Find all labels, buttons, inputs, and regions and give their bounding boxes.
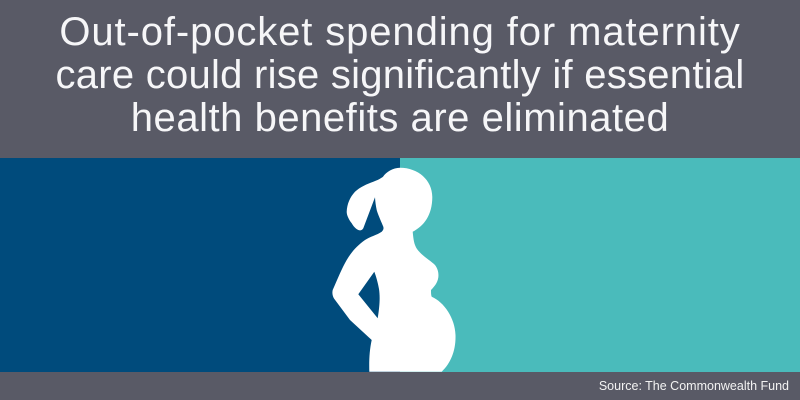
title: health benefits are eliminated	[131, 96, 669, 140]
source credit: Source: The Commonwealth Fund	[599, 379, 789, 393]
central illustration panel	[0, 158, 800, 372]
title: care could rise significantly if essential	[55, 53, 744, 97]
panel: right teal	[400, 158, 800, 372]
title: Out-of-pocket spending for maternity	[59, 10, 741, 54]
icon: pregnant woman silhouette	[332, 168, 456, 372]
title	[55, 10, 744, 140]
panel: left navy	[0, 158, 400, 372]
